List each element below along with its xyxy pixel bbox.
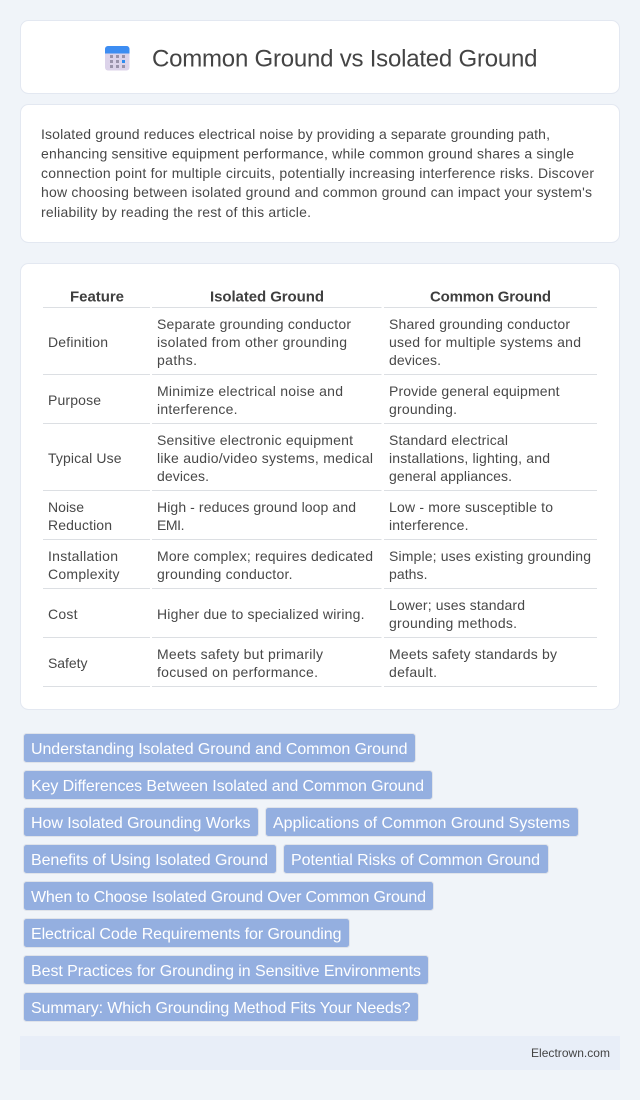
intro text panel [20, 104, 620, 242]
chip: Electrical Code Requirements for Grounding [31, 926, 342, 943]
row: typical use [48, 432, 550, 484]
row: installation complexity: Simple; uses existing grounding [389, 548, 591, 564]
row: installation complexity: Complexity [48, 566, 120, 582]
intro paragraph: how choosing between isolated ground and common ground can impact your system's [41, 184, 592, 200]
row: definition: Shared grounding conductor [389, 316, 570, 332]
chip: Best Practices for Grounding in Sensitive Environments [31, 963, 421, 980]
icon: calendar [105, 46, 130, 70]
row: definition: isolated from other grounding [157, 334, 347, 350]
chip [24, 734, 416, 762]
row: safety: Meets safety but primarily [157, 646, 323, 662]
row: definition: devices. [389, 352, 441, 368]
topic link chips [24, 734, 578, 1022]
row: installation complexity [48, 548, 591, 582]
row: noise reduction [48, 499, 553, 533]
row: cost: Higher due to specialized wiring. [157, 606, 364, 622]
chip [24, 882, 434, 910]
row: installation complexity: grounding conductor. [157, 566, 292, 582]
chip: Understanding Isolated Ground and Common Ground [31, 741, 408, 758]
row: noise reduction: Low - more susceptible to [389, 499, 553, 515]
row: definition: Definition [48, 334, 108, 350]
intro paragraph: connection point for multiple circuits, potentially increasing interference risks. Discover [41, 165, 594, 181]
row: installation complexity: More complex; requires dedicated [157, 548, 373, 564]
row: safety: Safety [48, 655, 88, 671]
row: purpose: Provide general equipment [389, 383, 560, 399]
title: Common Ground vs Isolated Ground [152, 46, 538, 72]
row: installation complexity: paths. [389, 566, 428, 582]
footer credit: Electrown.com [531, 1046, 610, 1060]
chip [24, 844, 276, 874]
intro paragraph [41, 126, 594, 220]
row: purpose: Minimize electrical noise and [157, 383, 343, 399]
table header: Common Ground [430, 288, 551, 306]
header card [20, 20, 620, 94]
row: installation complexity: Installation [48, 548, 118, 564]
chip [24, 956, 428, 984]
row: safety: Meets safety standards by [389, 646, 557, 662]
row: typical use: Typical Use [48, 450, 122, 466]
row: definition: paths. [157, 352, 197, 368]
footer bar [20, 1036, 620, 1070]
intro paragraph: Isolated ground reduces electrical noise by providing a separate grounding path, [41, 126, 550, 142]
row: typical use: like audio/video systems, medical [157, 450, 373, 466]
row: cost [48, 597, 525, 631]
row: cost: grounding methods. [389, 615, 517, 631]
intro paragraph: reliability by reading the rest of this article. [41, 204, 311, 220]
row: typical use: installations, lighting, and [389, 450, 550, 466]
chip [24, 992, 418, 1022]
table header: Feature [70, 288, 124, 306]
intro paragraph: enhancing sensitive equipment performance, while common ground shares a single [41, 146, 574, 162]
row: cost: Lower; uses standard [389, 597, 525, 613]
chip: Potential Risks of Common Ground [291, 852, 540, 869]
row: typical use: Sensitive electronic equipment [157, 432, 353, 448]
row: purpose: Purpose [48, 392, 101, 408]
table header: Isolated Ground [210, 288, 324, 306]
panel: comparison table [20, 264, 620, 710]
row: typical use: devices. [157, 468, 209, 484]
row: typical use: general appliances. [389, 468, 512, 484]
row: noise reduction: interference. [389, 517, 468, 533]
chip: How Isolated Grounding Works [31, 815, 250, 832]
row: purpose: interference. [157, 401, 238, 417]
chip [284, 844, 548, 874]
chip [24, 808, 258, 836]
row: noise reduction: EMI. [157, 517, 184, 533]
row: cost: Cost [48, 606, 78, 622]
row: purpose [48, 383, 560, 417]
chip: Benefits of Using Isolated Ground [31, 852, 268, 869]
row: definition: Separate grounding conductor [157, 316, 351, 332]
row: noise reduction: High - reduces ground loop and [157, 499, 356, 515]
row: noise reduction: Reduction [48, 517, 112, 533]
row: safety [48, 646, 557, 680]
row: definition [48, 316, 581, 368]
row: noise reduction: Noise [48, 499, 84, 515]
row: safety: focused on performance. [157, 664, 318, 680]
chip [266, 808, 578, 836]
chip: Summary: Which Grounding Method Fits Your Needs? [31, 1000, 411, 1017]
chip [24, 918, 350, 948]
chip: Key Differences Between Isolated and Common Ground [31, 778, 424, 795]
chip: Applications of Common Ground Systems [273, 815, 570, 832]
row: definition: used for multiple systems and [389, 334, 581, 350]
table header [70, 288, 551, 306]
row: safety: default. [389, 664, 437, 680]
row: purpose: grounding. [389, 401, 457, 417]
chip: When to Choose Isolated Ground Over Common Ground [31, 889, 426, 906]
chip [24, 770, 432, 800]
row: typical use: Standard electrical [389, 432, 508, 448]
